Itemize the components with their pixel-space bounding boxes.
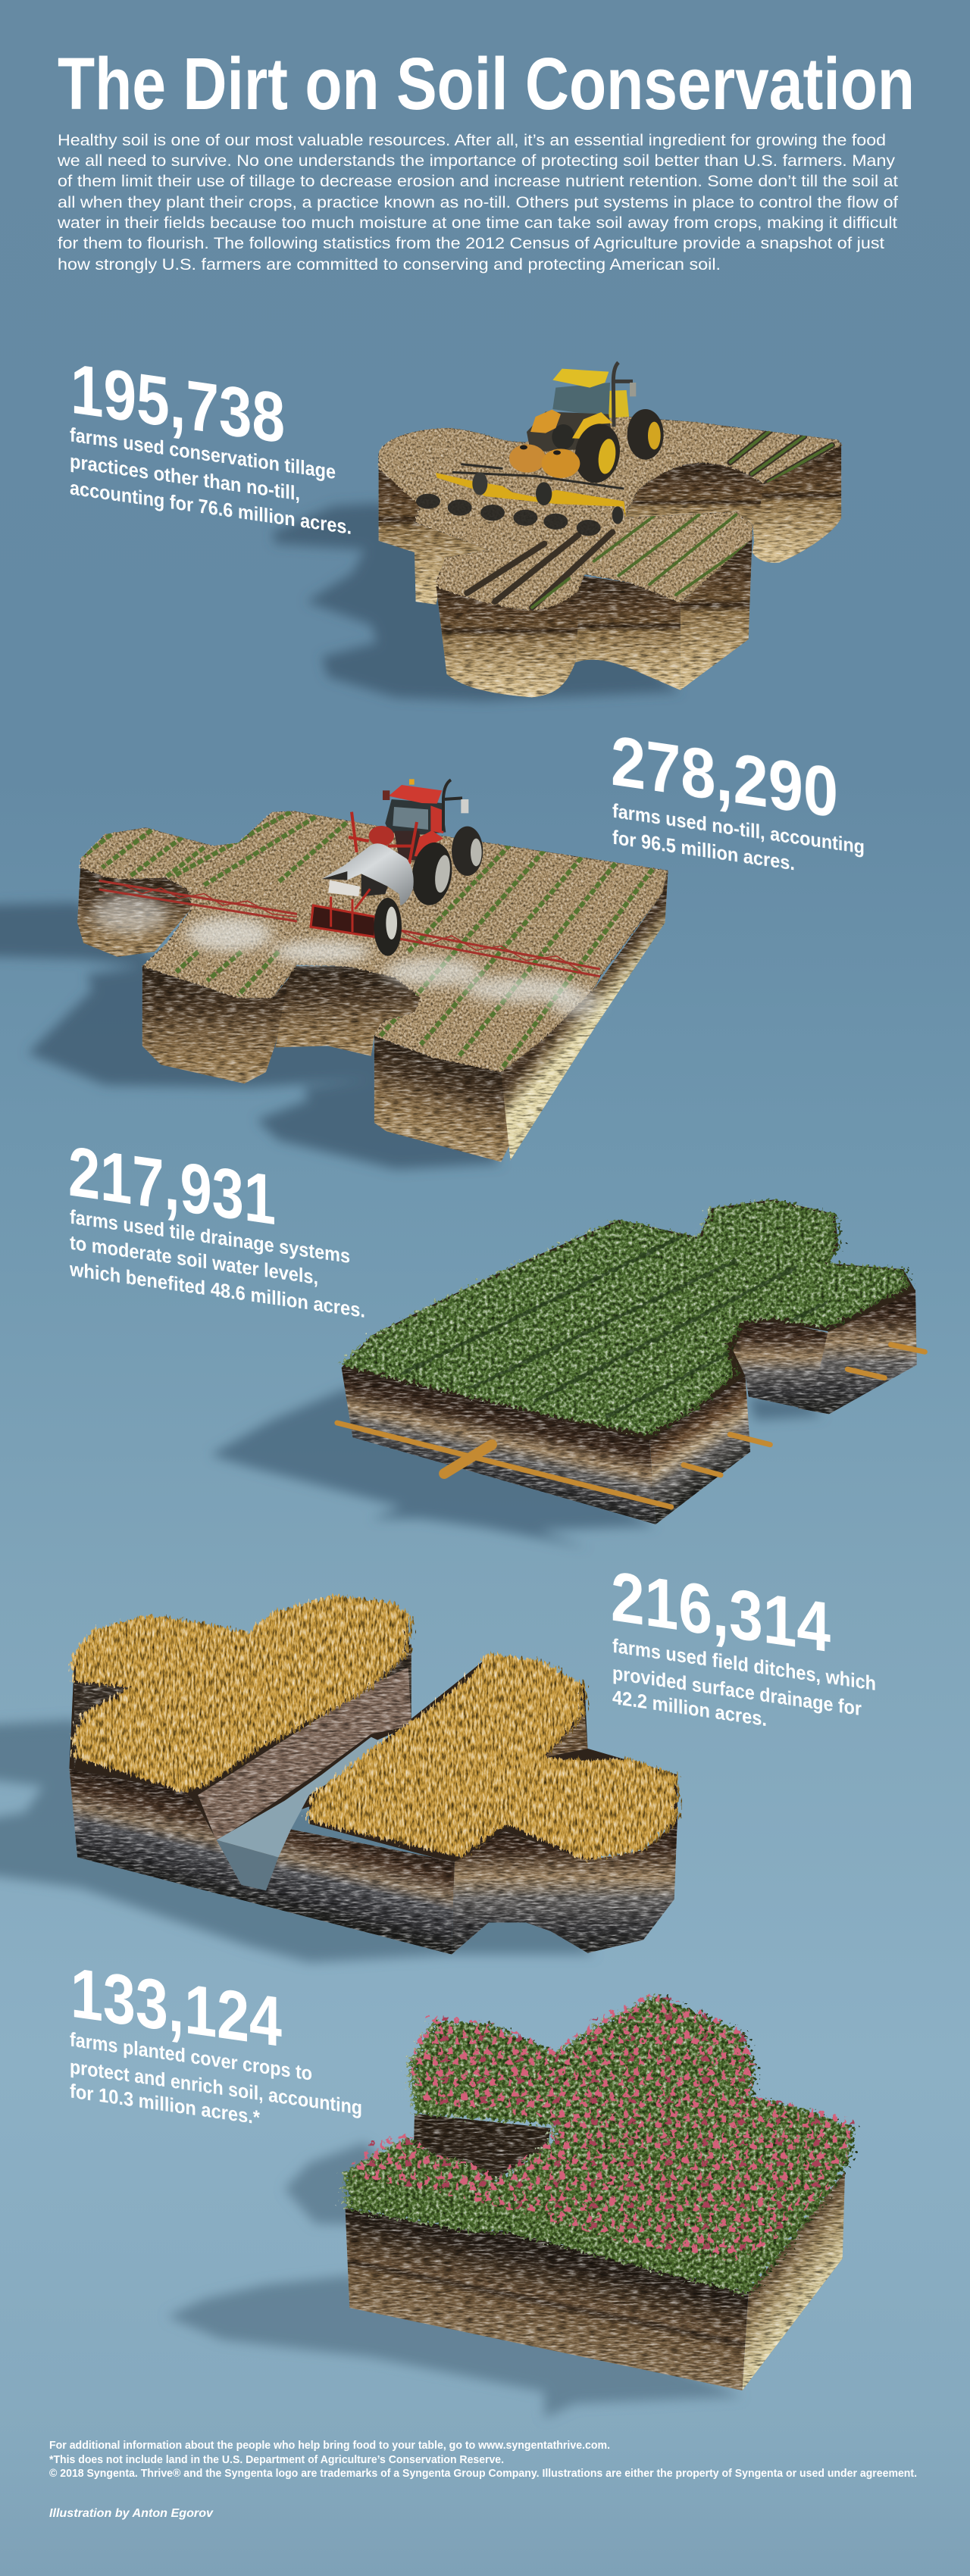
stat: field ditches: 216,314	[611, 1556, 831, 1667]
straw surface	[80, 811, 668, 1072]
surface underlay	[342, 1199, 915, 1440]
ditch water	[217, 1737, 383, 1857]
soil walls	[77, 868, 668, 1162]
stat: cover crops: for 10.3 million acres.*	[70, 2079, 261, 2129]
ditch wall	[217, 1840, 278, 1890]
pink flower spikes	[343, 1992, 853, 2262]
stat: tile drainage	[68, 1131, 365, 1322]
drainage pipes	[337, 1345, 925, 1507]
shadow	[0, 902, 501, 1169]
stat: field ditches: farms used field ditches, which	[612, 1634, 876, 1695]
stat: tile drainage: which benefited 48.6 million acres.	[69, 1258, 365, 1322]
stat: no-till: for 96.5 million acres.	[612, 826, 795, 874]
surface underlay	[69, 1615, 677, 1863]
stat: tile drainage: 217,931	[68, 1131, 276, 1240]
illustration: cover crop block	[167, 1992, 853, 2418]
soil walls	[345, 2114, 845, 2390]
intro paragraph: how strongly U.S. farmers are committed to conserving and protecting American soil.	[58, 256, 721, 274]
stat: cover crops: 133,124	[70, 1952, 282, 2062]
illustration credit: Illustration by Anton Egorov	[49, 2507, 214, 2520]
wheat right	[309, 1653, 677, 1860]
intro paragraph	[57, 132, 898, 274]
surface underlay	[379, 416, 841, 611]
illustration: no-till soil block	[0, 811, 668, 1169]
stat: field ditches	[611, 1556, 876, 1746]
crop rows	[467, 430, 832, 608]
intro paragraph: Healthy soil is one of our most valuable resources. After all, it’s an essential ingredient for growing the food	[58, 132, 886, 149]
illustration: tile drainage block with foliage	[211, 1199, 925, 1548]
spray mist	[92, 894, 600, 1017]
shadow	[211, 1388, 823, 1548]
plant foliage	[343, 1995, 853, 2295]
soil walls	[342, 1290, 917, 1524]
stat: conservation tillage: practices other than no-till,	[70, 449, 300, 505]
icon: yellow tractor with tillage implement	[416, 362, 664, 536]
stat: conservation tillage: farms used conservation tillage	[70, 423, 336, 483]
stat: conservation tillage	[70, 349, 352, 539]
intro paragraph: all when they plant their crops, a practice known as no-till. Others put systems in place to control the flow of	[58, 194, 898, 211]
stat: cover crops: protect and enrich soil, accounting	[70, 2055, 362, 2119]
crop rows	[83, 812, 652, 1069]
intro paragraph: water in their fields because too much moisture at one time can take soil away from crops, making it difficult	[57, 214, 897, 232]
intro paragraph: of them limit their use of tillage to decrease erosion and increase nutrient retention. Some don’t till the soil at	[58, 173, 898, 190]
stat: field ditches: provided surface drainage for	[612, 1662, 862, 1720]
illustration: tillage soil block	[272, 416, 841, 701]
footer notes: *This does not include land in the U.S. Department of Agriculture’s Conservation Reserve.	[49, 2453, 504, 2466]
stat: cover crops: farms planted cover crops to	[70, 2027, 312, 2085]
shadow	[272, 503, 681, 701]
stat: no-till: 278,290	[611, 721, 838, 833]
foliage	[340, 1199, 909, 1434]
stat: field ditches: 42.2 million acres.	[612, 1686, 767, 1730]
footer notes: For additional information about the people who help bring food to your table, go to www.syngentathrive.com.	[49, 2439, 610, 2452]
stat: conservation tillage: 195,738	[70, 349, 285, 458]
surface underlay	[80, 811, 668, 1072]
intro paragraph: for them to flourish. The following statistics from the 2012 Census of Agriculture provide a snapshot of just	[58, 235, 884, 252]
icon: red tractor with silver sprayer tank	[311, 779, 483, 956]
footer notes	[49, 2439, 917, 2480]
straw surface	[379, 416, 841, 611]
soil walls	[379, 442, 841, 697]
crop row gaps	[402, 1237, 829, 1417]
ditch bank	[198, 1668, 411, 1841]
intro paragraph: we all need to survive. No one understands the importance of protecting soil better than U.S. farmers. Many	[57, 152, 896, 170]
stat: cover crops	[70, 1952, 362, 2143]
soil walls	[69, 1644, 677, 1955]
footer notes: © 2018 Syngenta. Thrive® and the Syngenta logo are trademarks of a Syngenta Group Company. Illustrations are either the property of Syngenta or used under agreement.	[49, 2467, 917, 2480]
stat: tile drainage: farms used tile drainage systems	[70, 1205, 350, 1268]
stat: tile drainage: to moderate soil water levels,	[70, 1231, 318, 1289]
stat: conservation tillage: accounting for 76.6 million acres.	[70, 476, 352, 539]
wheat left	[71, 1595, 411, 1792]
shadow	[167, 2143, 743, 2418]
stat: no-till: farms used no-till, accounting	[612, 799, 865, 858]
illustration: field ditch block with wheat	[0, 1595, 677, 1962]
shadow	[0, 1720, 594, 1962]
spray boom	[99, 880, 600, 977]
